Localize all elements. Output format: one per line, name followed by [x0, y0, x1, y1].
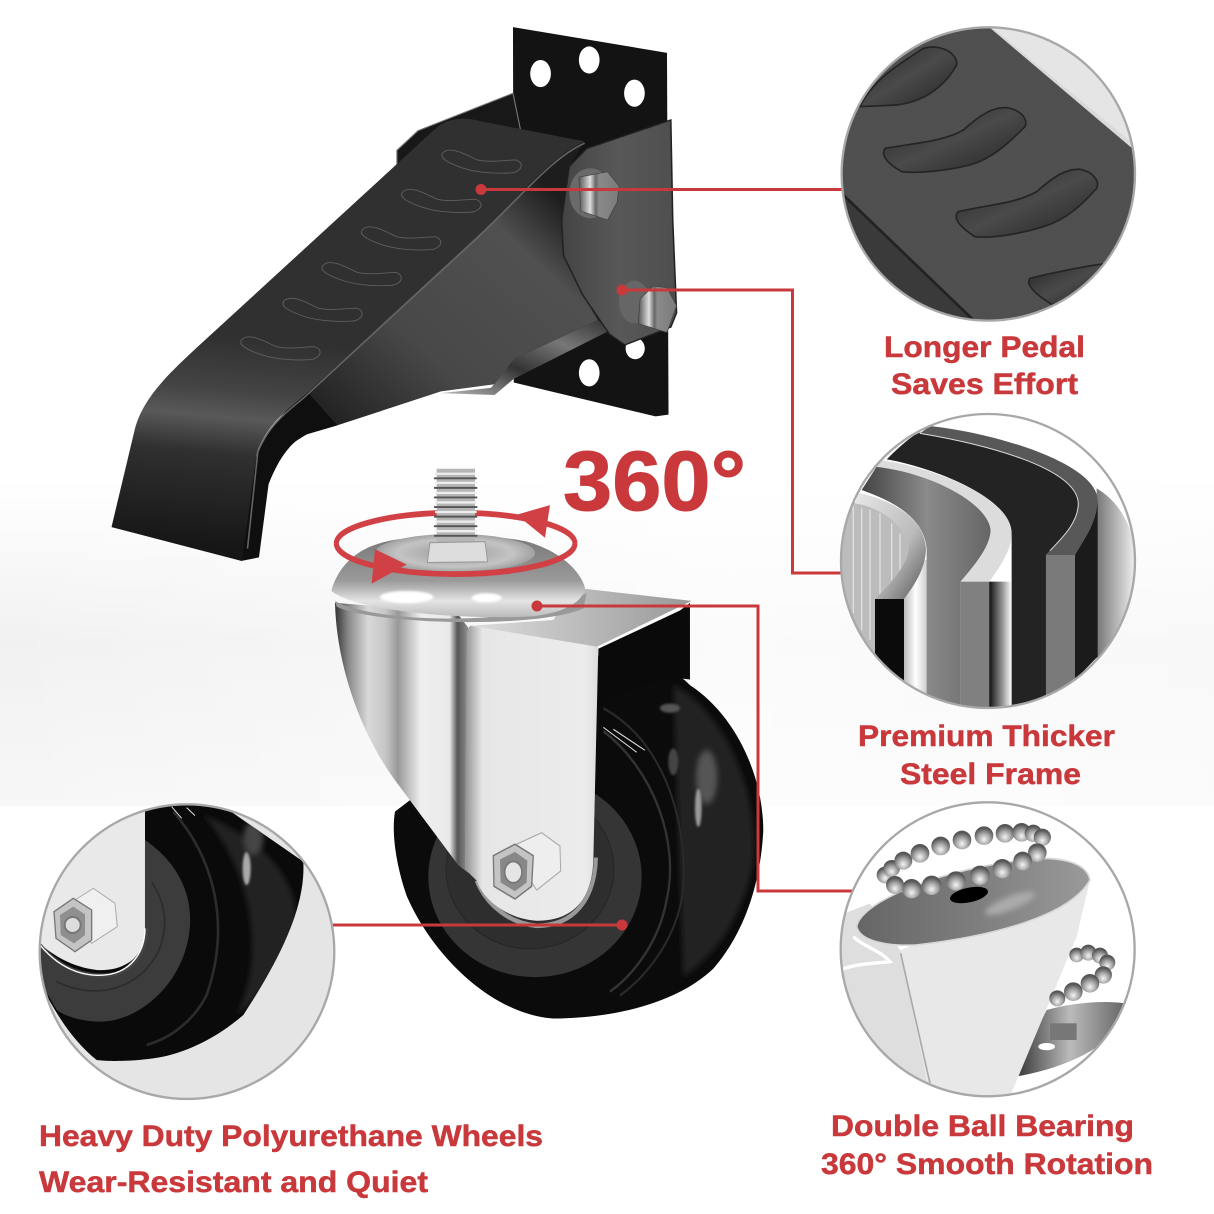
fork chrome ring: [477, 858, 596, 926]
light corner: [994, 28, 1130, 140]
mounting bracket plate: [562, 120, 677, 345]
side face of pedal: [284, 141, 598, 449]
axle bolt: [493, 833, 561, 899]
hub inner ring: [57, 882, 165, 991]
caster wheel product: [332, 469, 763, 1018]
caption: wheels: Wear-Resistant and Quiet: [39, 1166, 428, 1199]
fork lower: [37, 802, 145, 970]
wheel hub: [428, 776, 642, 977]
third frame band: [920, 426, 1098, 555]
detail circle: pedal texture: [837, 22, 1143, 335]
threaded stud: [427, 469, 488, 563]
pedal bracket product: [111, 27, 677, 561]
arrowhead right: [517, 505, 550, 538]
tread groove 3: [956, 169, 1097, 237]
black tyre: [37, 802, 303, 1061]
callout line: wheel: [333, 920, 628, 930]
detail circle: steel frame layers: [840, 414, 1140, 712]
pedal tip outer edge: [241, 391, 338, 561]
caption: ball bearing: Double Ball Bearing: [831, 1110, 1134, 1143]
pedal surface: [837, 22, 1140, 325]
tread groove 2: [884, 108, 1026, 172]
dark right edge: [1075, 500, 1098, 680]
dome swivel head: [332, 534, 587, 622]
chrome ring: [40, 928, 147, 976]
lower ball ring: [1049, 945, 1115, 1006]
hub: [37, 840, 190, 1022]
caption: wheels: Heavy Duty Polyurethane Wheels: [39, 1120, 543, 1153]
dark layer: [887, 433, 1078, 710]
black rectangle: [875, 599, 904, 680]
brushed steel surface: [842, 502, 908, 653]
caption: wheels: [39, 1120, 543, 1199]
caption: ball bearing: [821, 1110, 1153, 1181]
large gray layer: [862, 467, 991, 710]
white strip: [904, 560, 927, 703]
axle bolt: [54, 888, 117, 952]
tread groove 1: [860, 47, 957, 107]
caption: longer pedal: Longer Pedal: [884, 331, 1085, 364]
second frame band: [873, 460, 1012, 582]
gray bar right: [1046, 555, 1075, 702]
tyre highlights: [147, 807, 297, 1045]
wheel highlights: [603, 685, 754, 995]
callout line: bearing: [532, 600, 852, 891]
arrowhead left: [372, 549, 407, 584]
detail circle: double ball bearing: [837, 802, 1135, 1097]
callout line: steel frame: [616, 284, 843, 573]
thin highlight: [920, 433, 1078, 551]
lower chrome arm: [441, 320, 610, 395]
rotation ring back half: [336, 513, 575, 543]
caption: steel frame: Steel Frame: [900, 758, 1081, 791]
caption: longer pedal: [884, 331, 1085, 401]
fork crease: [840, 937, 890, 970]
caption: longer pedal: Saves Effort: [891, 368, 1078, 401]
gray bar: [961, 582, 990, 712]
lower bolt: [619, 281, 677, 332]
caption: steel frame: [858, 720, 1115, 791]
pedal top face: [111, 119, 585, 561]
fork front face: [465, 626, 598, 921]
upper bolt: [569, 168, 619, 220]
caption: steel frame: Premium Thicker: [858, 720, 1115, 753]
top plate: [857, 858, 1090, 945]
wheel tyres: [394, 655, 763, 1018]
rotation ring front half: [336, 543, 575, 574]
mounting plate with holes: [513, 27, 669, 416]
lower plate: [1015, 1002, 1125, 1077]
rear arm: [397, 93, 521, 166]
pedal edge highlight: [247, 143, 585, 549]
callout line: pedal: [476, 184, 843, 195]
fork inner black: [598, 603, 690, 704]
fork top plate: [470, 587, 692, 647]
cylinder shading: [989, 582, 1012, 712]
crease line: [901, 953, 930, 1083]
swivel cone body: [335, 603, 468, 873]
upper ball ring: [877, 823, 1051, 898]
surface grain: [992, 28, 1132, 148]
right shadow: [1096, 488, 1134, 658]
caption: ball bearing: 360° Smooth Rotation: [821, 1148, 1153, 1181]
left fork panel: [842, 904, 927, 1082]
first frame band: [855, 493, 926, 599]
background gradient band: [0, 480, 1214, 806]
cone body: [900, 880, 1090, 1097]
tread groove 4: [1029, 263, 1107, 304]
360 degree label: 360°: [563, 434, 746, 528]
detail circle: polyurethane wheel: [37, 802, 334, 1099]
center hole: [950, 886, 988, 904]
dark edge below pedal: [844, 194, 974, 319]
pedal treads: [241, 150, 521, 360]
